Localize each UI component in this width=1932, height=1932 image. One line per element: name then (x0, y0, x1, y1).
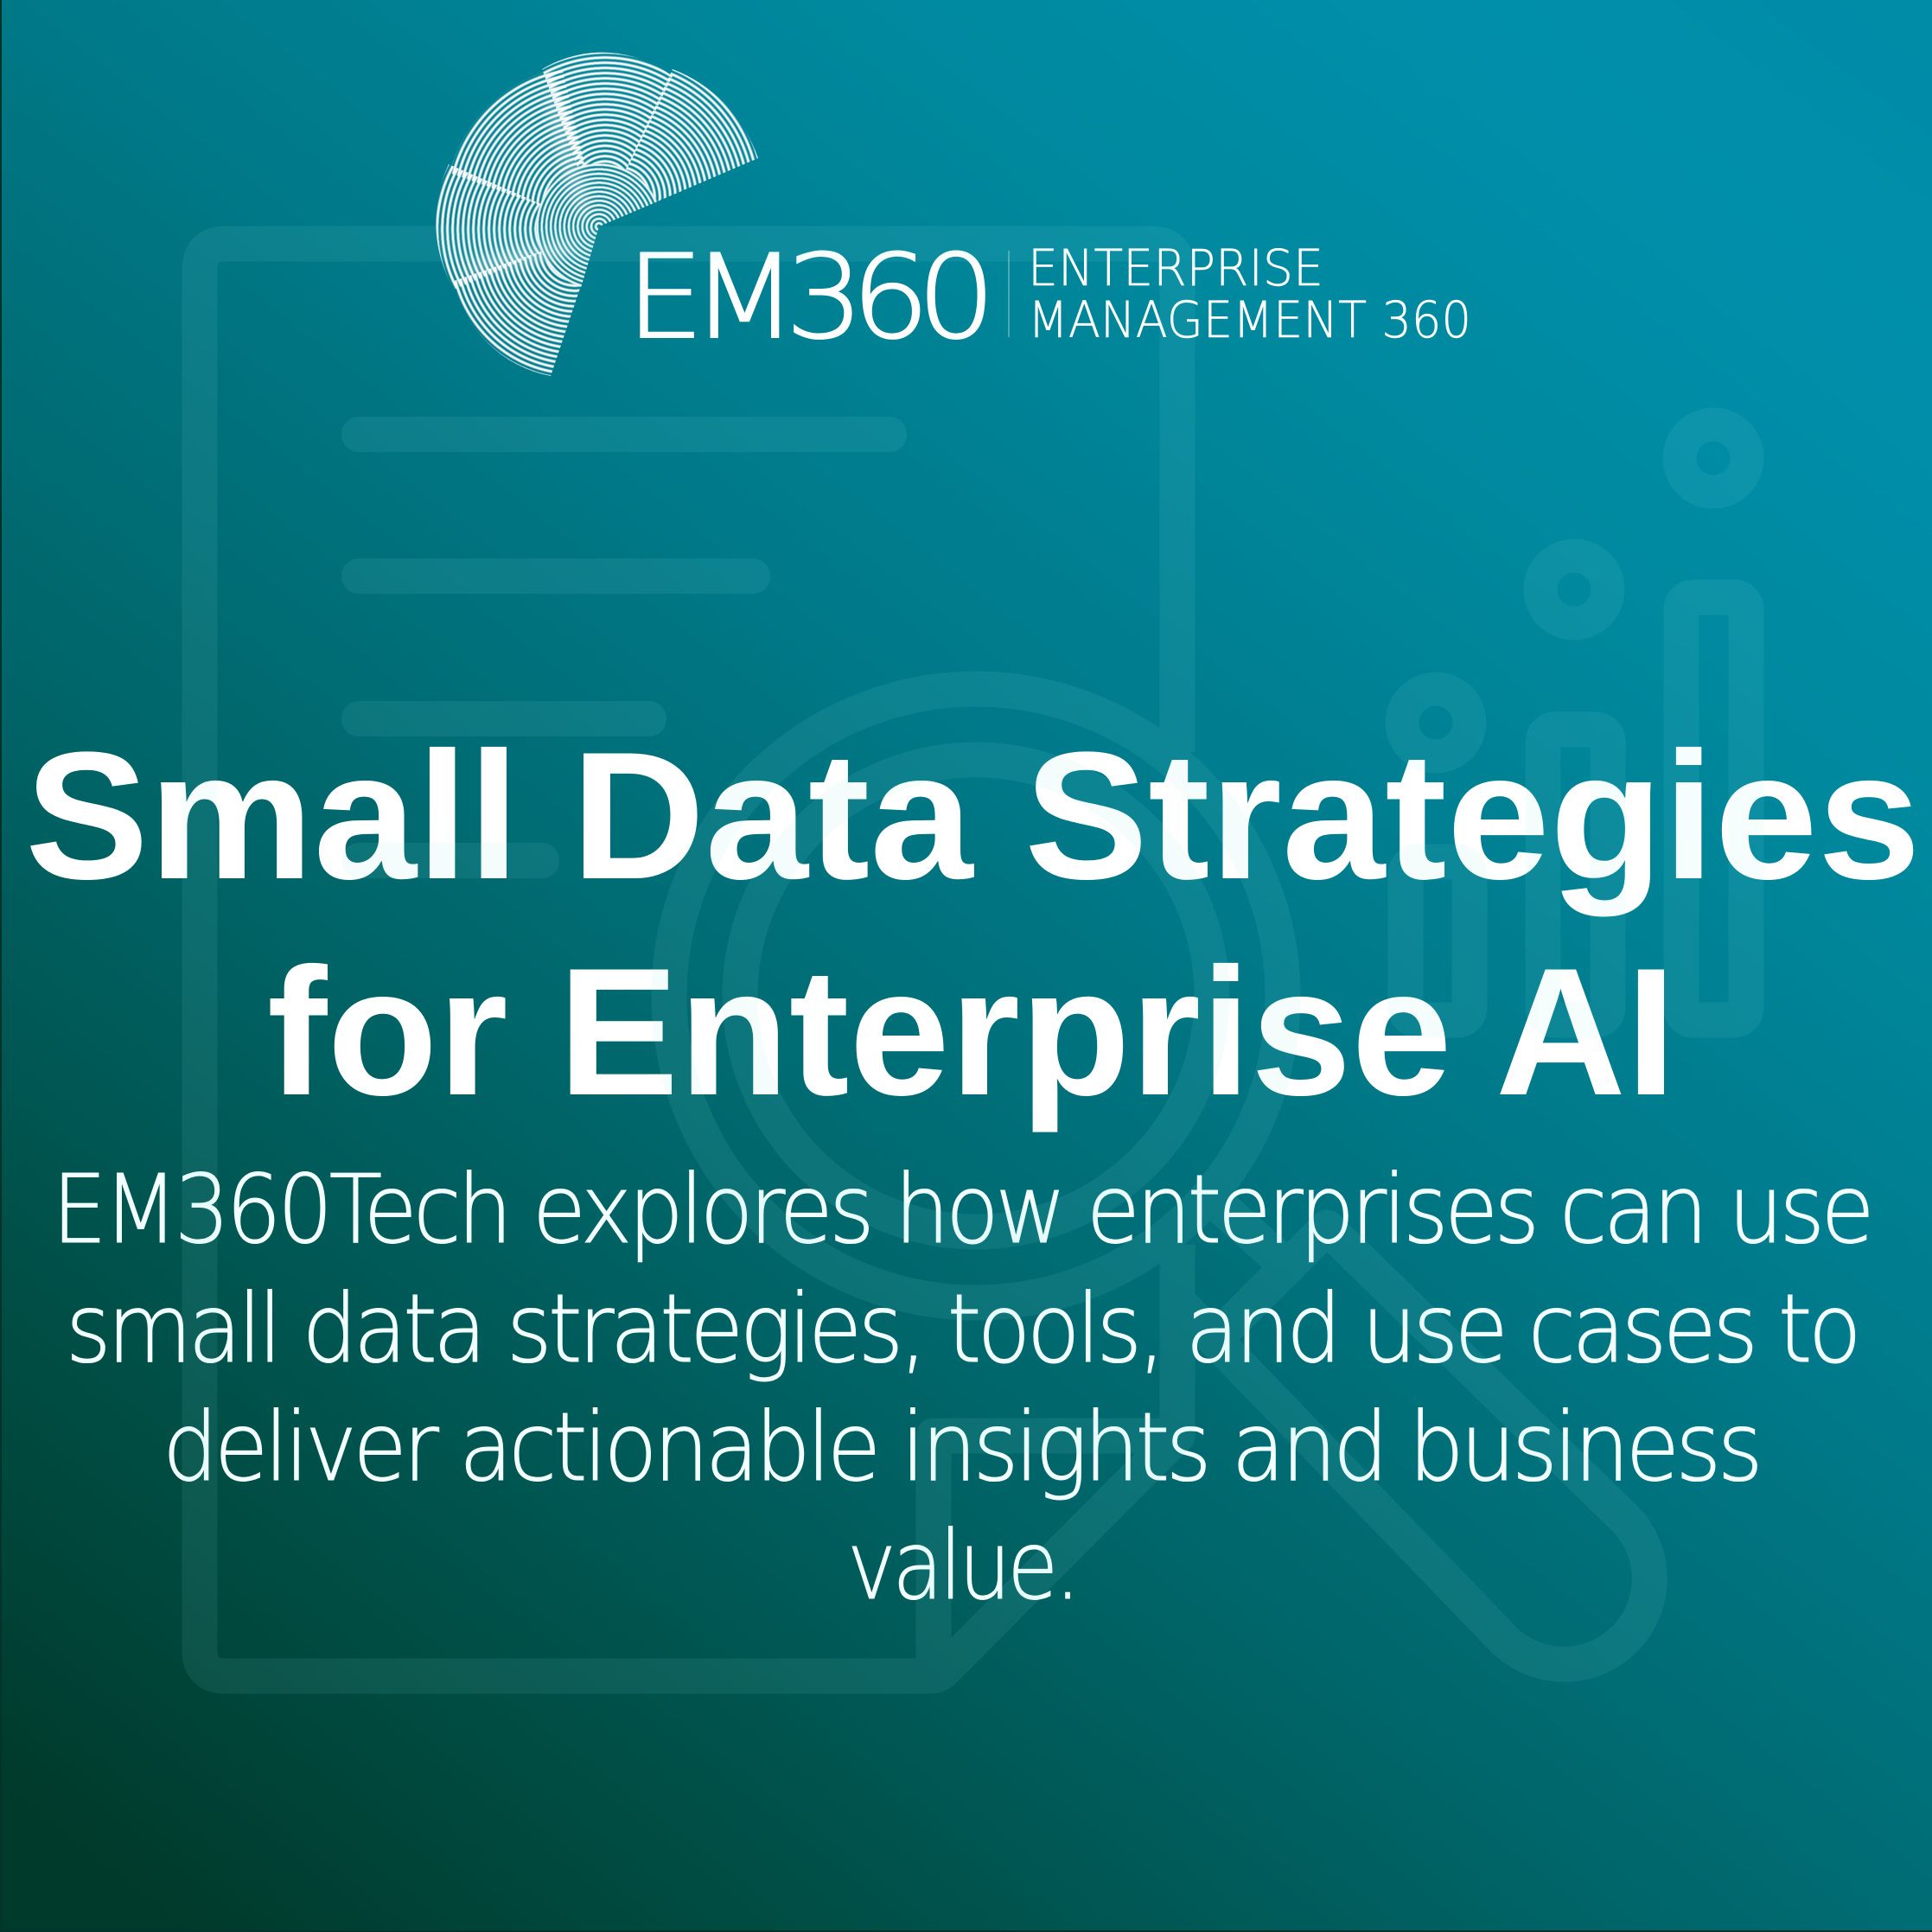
icon: concentric wave fan (436, 52, 758, 376)
logo lobe: bottom (455, 251, 581, 376)
logo core near apex (536, 163, 657, 287)
watermark: magnifier handle (1177, 1197, 1649, 1664)
watermark: document outline (200, 244, 1177, 1676)
subtitle line 3: deliver actionable insights and business (163, 1392, 1759, 1502)
subtitle (52, 1158, 1871, 1621)
logo lobe: left (436, 164, 541, 289)
logo (436, 52, 1471, 376)
watermark: bar chart (1402, 424, 1747, 1020)
title line 2: for Enterprise AI (267, 930, 1676, 1133)
watermark: magnifier rings (669, 689, 1283, 1303)
logo glow ridge lower (457, 237, 580, 280)
logo lobe: right (626, 69, 758, 201)
logo lobe: top (542, 52, 673, 169)
logo lobe: upper left (451, 67, 584, 205)
watermark: document text lines (341, 417, 907, 878)
logo wordmark (626, 230, 1471, 341)
subtitle line 4: value. (847, 1510, 1077, 1621)
logo tagline line 1: ENTERPRISE (1028, 239, 1323, 297)
title (25, 726, 1921, 1133)
logo glow ridge upper (539, 86, 597, 225)
